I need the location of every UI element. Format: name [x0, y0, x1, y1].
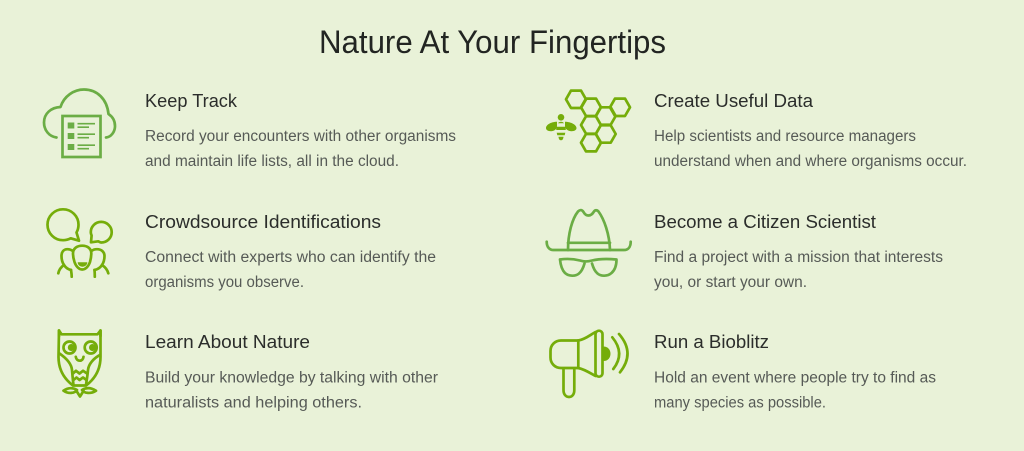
title: Nature At Your Fingertips — [319, 24, 666, 60]
description — [654, 128, 967, 170]
description: Hold an event where people try to find as — [654, 370, 936, 386]
panel: run a bioblitz — [550, 331, 936, 412]
description: Help scientists and resource managers — [654, 128, 916, 145]
heading: Create Useful Data — [654, 90, 814, 111]
heading: Become a Citizen Scientist — [654, 211, 876, 232]
description — [145, 370, 438, 412]
panel: learn about nature — [58, 330, 438, 412]
description: Build your knowledge by talking with other — [145, 370, 438, 386]
description: understand when and where organisms occur. — [654, 153, 967, 170]
panel: crowdsource identifications — [48, 209, 436, 291]
icon: owl — [58, 330, 100, 396]
description: Find a project with a mission that interests — [654, 249, 943, 266]
panel: create useful data — [546, 90, 967, 170]
heading: Crowdsource Identifications — [145, 211, 381, 232]
icon: hat and glasses — [547, 210, 631, 276]
description: organisms you observe. — [145, 274, 304, 291]
description — [145, 249, 436, 291]
description: Record your encounters with other organisms — [145, 128, 456, 145]
icon: bee and honeycomb — [546, 91, 630, 151]
icon: people with speech bubbles — [48, 209, 112, 277]
icon: megaphone — [550, 331, 628, 397]
description: many species as possible. — [654, 394, 826, 412]
description — [654, 370, 936, 412]
description: Connect with experts who can identify the — [145, 249, 436, 266]
heading: Keep Track — [145, 90, 238, 111]
description: you, or start your own. — [654, 274, 807, 291]
heading: Run a Bioblitz — [654, 331, 769, 352]
description: and maintain life lists, all in the cloud. — [145, 153, 399, 170]
panel: keep track — [44, 90, 456, 170]
icon: cloud with checklist — [44, 90, 115, 157]
description: naturalists and helping others. — [145, 394, 362, 412]
heading: Learn About Nature — [145, 331, 310, 352]
panel: become a citizen scientist — [547, 210, 943, 291]
description — [145, 128, 456, 170]
description — [654, 249, 943, 291]
